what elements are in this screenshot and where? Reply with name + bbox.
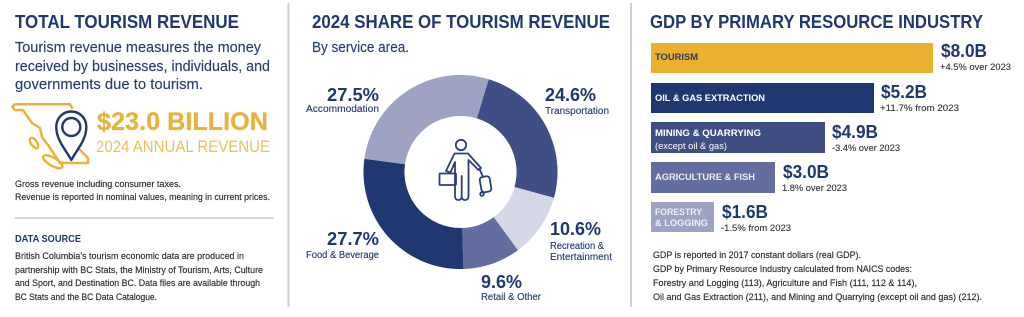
- bar: tourism: [651, 41, 1011, 73]
- bar: agriculture and fish: AGRICULTURE & FISH: [655, 172, 755, 183]
- icon: traveller with luggage: [440, 140, 492, 200]
- bar: mining and quarrying: [651, 122, 900, 154]
- bar: oil and gas extraction: $5.2B: [881, 82, 927, 102]
- text block: revenue notes: Revenue is reported in nominal values, meaning in current prices.: [15, 192, 270, 203]
- text block: data source description: British Columbia’s tourism economic data are produced in: [15, 251, 244, 262]
- text block: GDP notes: [653, 250, 982, 303]
- label: recreation and entertainment 10.6%: Entertainment: [550, 252, 612, 263]
- label: transportation 24.6%: [545, 85, 609, 117]
- bar: mining and quarrying: $4.9B: [832, 122, 878, 142]
- label: recreation and entertainment 10.6%: [550, 219, 612, 263]
- donut chart: [363, 75, 558, 269]
- label: recreation and entertainment 10.6%: Recreation &: [550, 241, 604, 252]
- heading: data source: DATA SOURCE: [15, 234, 81, 245]
- label: transportation 24.6%: 24.6%: [545, 85, 596, 105]
- label: food and beverage 27.7%: [306, 229, 379, 261]
- label: food and beverage 27.7%: 27.7%: [327, 229, 379, 249]
- callout: annual revenue figure: [96, 108, 270, 156]
- bar: mining and quarrying: MINING & QUARRYING: [655, 128, 761, 139]
- text block: GDP notes: Oil and Gas Extraction (211), and Mining and Quarrying (except oil and gas) (212).: [653, 292, 982, 303]
- text block: GDP notes: Forestry and Logging (113), Agriculture and Fish (111, 112 & 114),: [653, 278, 917, 289]
- text block: GDP notes: GDP by Primary Resource Industry calculated from NAICS codes:: [653, 264, 912, 275]
- bar: agriculture and fish: $3.0B: [783, 162, 829, 182]
- panel: total tourism revenue: [12, 12, 274, 303]
- bar: agriculture and fish: [651, 162, 847, 194]
- icon: BC map with location pin: [12, 104, 88, 171]
- bar: forestry and logging: FORESTRY: [655, 207, 703, 218]
- label: accommodation 27.5%: Accommodation: [306, 104, 379, 115]
- text block: revenue definition: [15, 39, 270, 93]
- text block: data source description: partnership with BC Stats, the Ministry of Tourism, Arts, Culture: [15, 265, 263, 276]
- label: recreation and entertainment 10.6%: 10.6%: [550, 219, 601, 239]
- bar: mining and quarrying: (except oil & gas): [655, 141, 727, 152]
- bar: mining and quarrying: -3.4% over 2023: [832, 143, 900, 154]
- text block: data source description: BC Stats and the BC Data Catalogue.: [15, 292, 157, 303]
- bar: oil and gas extraction: +11.7% from 2023: [880, 103, 959, 114]
- bar: forestry and logging: & LOGGING: [655, 218, 708, 229]
- bar: oil and gas extraction: [651, 82, 959, 114]
- bar: tourism: TOURISM: [655, 52, 698, 63]
- text block: revenue definition: Tourism revenue measures the money: [15, 39, 261, 56]
- label: retail and other 9.6%: [481, 272, 542, 303]
- bar: forestry and logging: $1.6B: [722, 202, 768, 222]
- heading: total tourism revenue: TOTAL TOURISM REVENUE: [15, 12, 239, 32]
- subheading: by service area: By service area.: [312, 39, 409, 56]
- bar: tourism: +4.5% over 2023: [940, 62, 1011, 73]
- text block: data source description: and Sport, and Destination BC. Data files are available through: [15, 278, 260, 289]
- heading: 2024 share of tourism revenue: 2024 SHARE OF TOURISM REVENUE: [312, 12, 610, 32]
- panel: GDP by primary resource industry: [650, 12, 1011, 303]
- callout: annual revenue figure: 2024 ANNUAL REVENUE: [96, 137, 270, 156]
- text block: revenue notes: [15, 179, 270, 203]
- label: food and beverage 27.7%: Food & Beverage: [306, 250, 379, 261]
- heading: GDP by primary resource industry: GDP BY PRIMARY RESOURCE INDUSTRY: [650, 12, 983, 32]
- panel: 2024 share of tourism revenue: [306, 12, 612, 303]
- callout: annual revenue figure: $23.0 BILLION: [97, 108, 268, 136]
- label: retail and other 9.6%: 9.6%: [481, 272, 522, 292]
- bar: agriculture and fish: 1.8% over 2023: [782, 183, 847, 194]
- label: retail and other 9.6%: Retail & Other: [481, 292, 542, 303]
- bar: forestry and logging: -1.5% from 2023: [721, 223, 791, 234]
- bar: tourism: $8.0B: [941, 41, 987, 61]
- bar: oil and gas extraction: OIL & GAS EXTRACTION: [655, 93, 765, 104]
- label: accommodation 27.5%: 27.5%: [327, 85, 379, 105]
- text block: revenue definition: received by businesses, individuals, and: [15, 58, 270, 75]
- text block: data source description: [15, 251, 263, 303]
- text block: revenue definition: governments due to tourism.: [15, 76, 203, 93]
- text block: revenue notes: Gross revenue including consumer taxes.: [15, 179, 181, 190]
- label: accommodation 27.5%: [306, 85, 379, 115]
- text block: GDP notes: GDP is reported in 2017 constant dollars (real GDP).: [653, 250, 861, 261]
- bar: forestry and logging: [651, 202, 791, 234]
- label: transportation 24.6%: Transportation: [545, 106, 609, 117]
